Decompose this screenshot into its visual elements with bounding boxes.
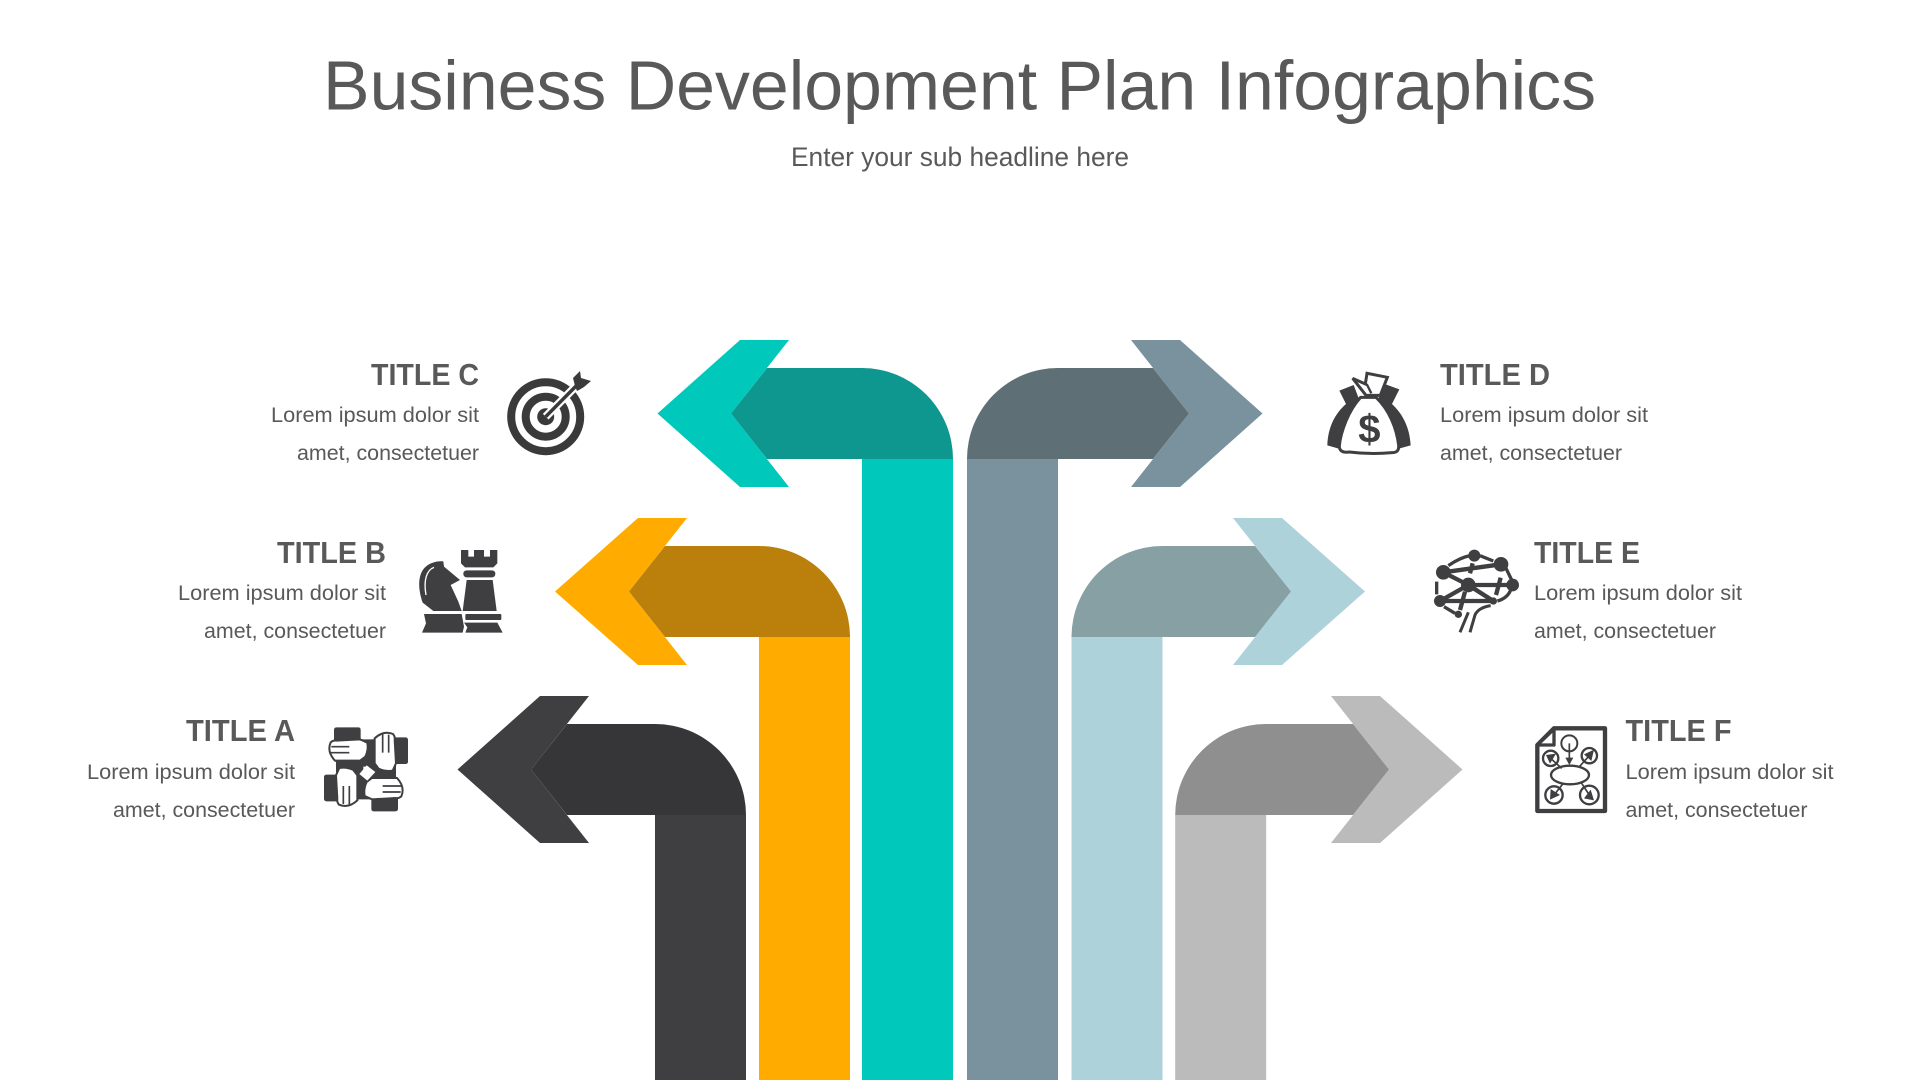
arrow B: amber <box>555 518 850 1080</box>
text block: title B: Lorem ipsum dolor sit <box>178 582 386 605</box>
text block: title D: amet, consectetuer <box>1440 442 1622 465</box>
arrow A: dark grey <box>458 696 746 1080</box>
arrow D: slate <box>967 340 1262 1080</box>
title: Business Development Plan Infographics <box>323 46 1596 124</box>
text block: title A: amet, consectetuer <box>113 799 295 822</box>
icon: brain network <box>1434 550 1519 632</box>
text block: title E: TITLE E <box>1534 535 1640 570</box>
arrow F: light grey <box>1175 696 1462 1080</box>
text block: title C: amet, consectetuer <box>297 442 479 465</box>
icon: four joined hands <box>324 727 408 811</box>
subtitle: Enter your sub headline here <box>791 142 1129 172</box>
icon: money bags: $ <box>1358 407 1380 451</box>
text block: title F <box>1626 713 1834 822</box>
text block: title F: TITLE F <box>1626 713 1732 748</box>
arrow C: teal <box>658 340 953 1080</box>
text block: title B <box>178 535 386 643</box>
text block: title E: Lorem ipsum dolor sit <box>1534 582 1742 605</box>
arrow E: pale blue <box>1072 518 1365 1080</box>
text block: title C: TITLE C <box>371 357 479 392</box>
text block: title D: Lorem ipsum dolor sit <box>1440 404 1648 427</box>
text block: title C: Lorem ipsum dolor sit <box>271 404 479 427</box>
text block: title F: amet, consectetuer <box>1626 799 1808 822</box>
text block: title F: Lorem ipsum dolor sit <box>1626 761 1834 784</box>
icon: strategy document <box>1537 728 1605 811</box>
text block: title A: TITLE A <box>186 713 295 748</box>
icon: money bags <box>1327 373 1411 454</box>
text block: title B: amet, consectetuer <box>204 620 386 643</box>
text block: title A: Lorem ipsum dolor sit <box>87 761 295 784</box>
text block: title A <box>87 713 295 822</box>
icon: target with dart <box>511 371 591 451</box>
text block: title D <box>1440 357 1648 465</box>
text block: title E: amet, consectetuer <box>1534 620 1716 643</box>
text block: title B: TITLE B <box>277 535 386 570</box>
text block: title E <box>1534 535 1742 643</box>
icon: chess knight and rook <box>419 550 503 633</box>
text block: title C <box>271 357 479 465</box>
text block: title D: TITLE D <box>1440 357 1550 392</box>
